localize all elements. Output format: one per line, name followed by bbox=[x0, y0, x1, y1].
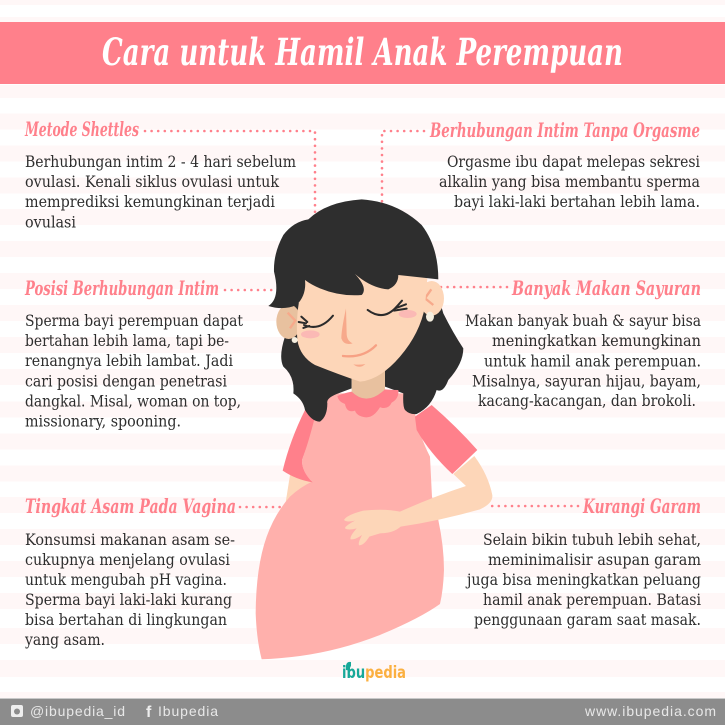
text block: Posisi: missionary, spooning. bbox=[25, 412, 181, 430]
nose bbox=[341, 308, 353, 344]
text block: Asam: yang asam. bbox=[24, 630, 105, 649]
text block: Garam: hamil anak perempuan. Batasi bbox=[483, 590, 701, 609]
heading: Tingkat Asam Pada Vagina: Tingkat Asam Pada Vagina bbox=[25, 495, 236, 518]
text block: Posisi: Sperma bayi perempuan dapat bbox=[25, 311, 243, 330]
lower lip bbox=[353, 364, 365, 367]
panel: Berhubungan Intim Tanpa Orgasme bbox=[429, 119, 700, 211]
text block: Asam: Sperma bayi laki-laki kurang bbox=[25, 590, 232, 609]
text block: Orgasme bbox=[439, 152, 700, 211]
left arm bbox=[285, 475, 315, 507]
heading: Posisi Berhubungan Intim: Posisi Berhubungan Intim bbox=[24, 277, 219, 300]
text block: Sayuran: kacang-kacangan, dan brokoli. bbox=[478, 391, 696, 410]
text block: Posisi: cari posisi dengan penetrasi bbox=[25, 372, 227, 390]
instagram handle: @ibupedia_id bbox=[30, 703, 125, 719]
back hair bbox=[281, 290, 463, 422]
text block: Posisi: dangkal. Misal, woman on top, bbox=[25, 392, 241, 410]
text block: Asam: bisa bertahan di lingkungan bbox=[25, 610, 227, 629]
facebook name: Ibupedia bbox=[158, 703, 218, 719]
text block: Sayuran: untuk hamil anak perempuan. bbox=[484, 352, 701, 370]
panel: Posisi Berhubungan Intim bbox=[24, 277, 243, 430]
top hair bbox=[268, 199, 438, 308]
face bbox=[297, 270, 427, 382]
earrings bbox=[292, 312, 434, 343]
icon: instagram bbox=[11, 705, 23, 717]
connector: Kurangi Garam bbox=[490, 505, 578, 507]
footer bar bbox=[0, 698, 725, 725]
body bbox=[256, 393, 492, 659]
text block: Garam: Selain bikin tubuh lebih sehat, bbox=[483, 530, 701, 549]
left sleeve bbox=[283, 410, 315, 482]
connector: Posisi Berhubungan Intim bbox=[225, 289, 275, 291]
panel: Metode Shettles bbox=[24, 118, 296, 232]
text block: Asam: untuk mengubah pH vagina. bbox=[25, 570, 227, 589]
logo: ibupedia bbox=[342, 662, 406, 683]
text block: Metode Shettles: ovulasi. Kenali siklus ovulasi untuk bbox=[25, 172, 279, 191]
panel: Kurangi Garam bbox=[465, 495, 701, 629]
text block: Posisi: renangnya lebih lambat. Jadi bbox=[25, 351, 233, 370]
panel: Tingkat Asam Pada Vagina bbox=[24, 495, 236, 649]
text block: Sayuran bbox=[465, 311, 701, 410]
text block: Asam bbox=[24, 530, 235, 649]
right ear bbox=[419, 281, 444, 316]
eyes bbox=[299, 301, 407, 328]
website: www.ibupedia.com bbox=[584, 703, 716, 719]
right sleeve bbox=[415, 405, 477, 474]
text block: Sayuran: meningkatkan kemungkinan bbox=[492, 331, 701, 350]
text block: Posisi bbox=[25, 311, 243, 430]
connector: Metode Shettles bbox=[145, 131, 315, 212]
panel: Banyak Makan Sayuran bbox=[465, 277, 701, 410]
dress bbox=[256, 393, 444, 659]
neck bbox=[352, 367, 385, 399]
text block: Metode Shettles: Berhubungan intim 2 - 4 hari sebelum bbox=[25, 152, 296, 171]
title banner bbox=[0, 22, 725, 84]
illustration: pregnant woman bbox=[256, 199, 492, 659]
logo text: ibupedia bbox=[342, 663, 406, 683]
heading: Metode Shettles: Metode Shettles bbox=[24, 118, 139, 141]
icon: facebook: f bbox=[146, 704, 152, 721]
text block: Garam: juga bisa meningkatkan peluang bbox=[465, 570, 701, 589]
text block: Asam: Konsumsi makanan asam se- bbox=[25, 530, 235, 549]
logo mark bbox=[346, 662, 351, 671]
connector: Tingkat Asam Pada Vagina bbox=[240, 506, 283, 508]
text block: Metode Shettles: ovulasi bbox=[25, 212, 76, 232]
connector: Banyak Makan Sayuran bbox=[440, 286, 507, 288]
collar bbox=[337, 389, 398, 417]
text block: Garam bbox=[465, 530, 701, 629]
ear marks bbox=[288, 289, 433, 328]
connector: Berhubungan Intim Tanpa Orgasme bbox=[382, 131, 424, 202]
text block: Asam: cukupnya menjelang ovulasi bbox=[25, 550, 230, 569]
head bbox=[268, 199, 463, 422]
text block: Garam: meminimalisir asupan garam bbox=[488, 550, 701, 569]
text block: Orgasme: alkalin yang bisa membantu sperma bbox=[439, 172, 700, 191]
text block: Orgasme: bayi laki-laki bertahan lebih lama. bbox=[454, 192, 700, 211]
text block: Posisi: bertahan lebih lama, tapi be- bbox=[25, 331, 229, 350]
right arm and hand bbox=[344, 456, 492, 545]
cheeks bbox=[301, 310, 417, 338]
text block: Metode Shettles: memprediksi kemungkinan terjadi bbox=[25, 192, 275, 211]
left ear bbox=[276, 304, 301, 339]
text block: Metode Shettles bbox=[25, 152, 296, 232]
mouth bbox=[343, 345, 376, 356]
